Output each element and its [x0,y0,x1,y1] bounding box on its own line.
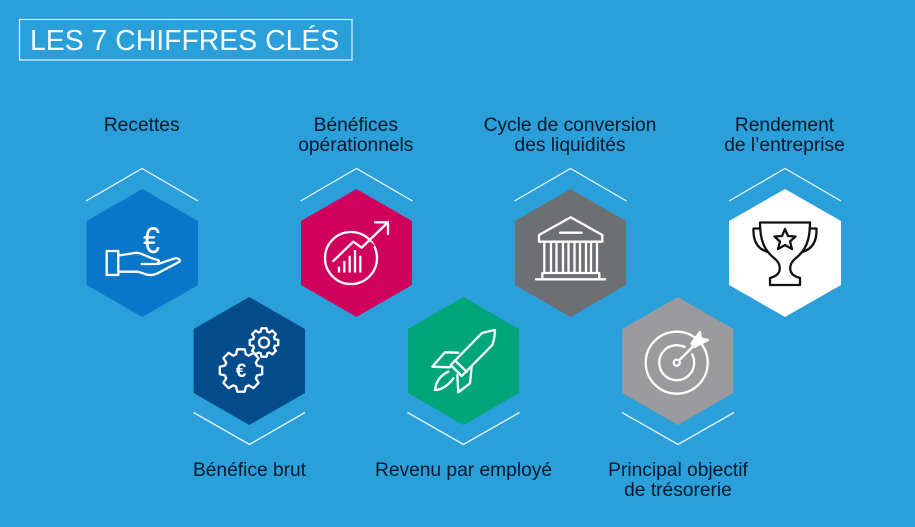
label: cycle de conversion: des liquidités [515,135,625,156]
hexagon: revenu par employé [408,297,519,425]
label: rendement: Rendement [735,115,835,136]
icon: rocket [432,330,495,392]
panel: rendement de l'entreprise [724,115,845,317]
chevron: principal objectif [622,412,734,444]
chevron: revenu par employé [408,412,520,444]
chevron: rendement [729,168,841,201]
title: LES 7 CHIFFRES CLÉS [30,25,339,57]
hexagon: bénéfice brut [194,297,305,425]
hexagon: bénéfices opérationnels [301,189,412,317]
hexagon: recettes [87,189,198,317]
icon: target [646,332,708,394]
icon: growth chart [325,222,388,284]
label: principal objectif: Principal objectif [608,460,749,481]
label: cycle de conversion: Cycle de conversion [484,115,656,136]
label: rendement: de l’entreprise [724,135,845,156]
panel: revenu par employé [375,297,552,481]
chevron: cycle de conversion [514,168,626,201]
chevron: bénéfice brut [194,412,305,444]
label: recettes: Recettes [104,115,180,136]
hexagon: principal objectif [622,297,733,425]
label: bénéfice brut: Bénéfice brut [193,460,307,481]
hexagon: rendement [729,189,841,317]
hexagon: cycle de conversion [515,189,626,317]
icon: bank [536,217,605,279]
label: bénéfices opérationnels: opérationnels [298,135,413,156]
icon: trophy [753,222,817,285]
panel: cycle de conversion des liquidités [484,115,656,317]
icon: gears with euro: € [236,361,247,382]
label: principal objectif: de trésorerie [624,480,732,501]
panel: principal objectif de trésorerie [608,297,749,501]
chevron: bénéfices opérationnels [300,168,412,201]
label: bénéfices opérationnels: Bénéfices [314,115,398,136]
panel: bénéfice brut [193,297,307,481]
icon: gears with euro [220,328,278,392]
chevron: recettes [86,168,198,201]
icon: hand with euro [107,220,180,275]
label: revenu par employé: Revenu par employé [375,460,552,481]
icon: hand with euro: € [143,220,160,262]
panel: recettes [86,115,198,317]
panel: bénéfices opérationnels [298,115,413,317]
